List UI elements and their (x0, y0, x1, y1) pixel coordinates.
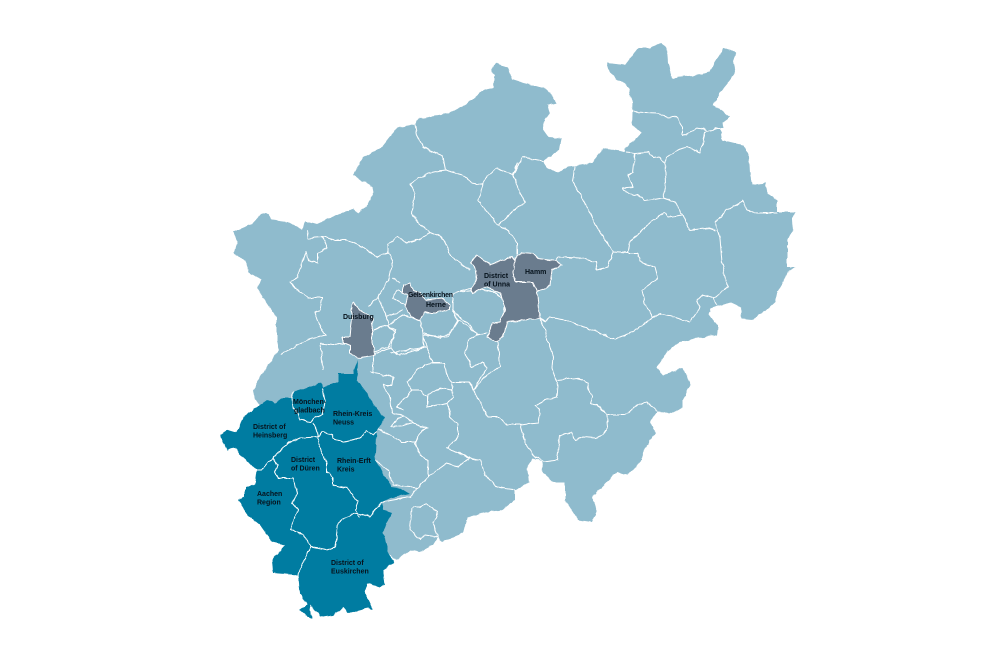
label: District of Unna: of Unna (484, 282, 510, 288)
district borders (255, 388, 382, 575)
label: District of Düren: of Düren (291, 466, 320, 472)
label: Rhein-Kreis Neuss: Rhein-Kreis (333, 411, 372, 418)
label: Gelsenkirchen: Gelsenkirchen (408, 292, 453, 299)
area: Duisburg (343, 302, 375, 358)
label: Herne: Herne (426, 302, 446, 309)
label: Rhein-Erft Kreis: Rhein-Erft (337, 458, 372, 465)
area: Gelsenkirchen and Herne (403, 283, 450, 320)
label: Rhein-Erft Kreis: Kreis (337, 466, 355, 474)
label: Duisburg: Duisburg (343, 314, 374, 321)
label: District of Euskirchen: District of (331, 560, 364, 567)
label: District of Heinsberg: Heinsberg (253, 432, 287, 440)
label: Rhein-Kreis Neuss: Neuss (333, 420, 354, 426)
map: North Rhine-Westphalia (220, 43, 796, 620)
label: Aachen Region: Region (257, 500, 281, 506)
label: Aachen Region: Aachen (257, 491, 282, 498)
label: District of Heinsberg: District of (253, 424, 286, 431)
label: Hamm: Hamm (525, 269, 546, 276)
label: Mönchengladbach: gladbach (294, 408, 325, 414)
labels (253, 269, 546, 576)
label: Mönchengladbach: Mönchen- (293, 399, 327, 406)
region: teal Aachen area districts (220, 360, 410, 620)
district borders (280, 112, 777, 540)
label: District of Düren: District (291, 457, 316, 464)
label: District of Euskirchen: Euskirchen (331, 568, 369, 576)
region: light blue districts (233, 43, 796, 559)
area: Hamm (513, 252, 562, 292)
region: grey Ruhr districts (343, 252, 562, 358)
area: District of Unna (471, 255, 540, 342)
label: District of Unna: District (484, 273, 509, 280)
